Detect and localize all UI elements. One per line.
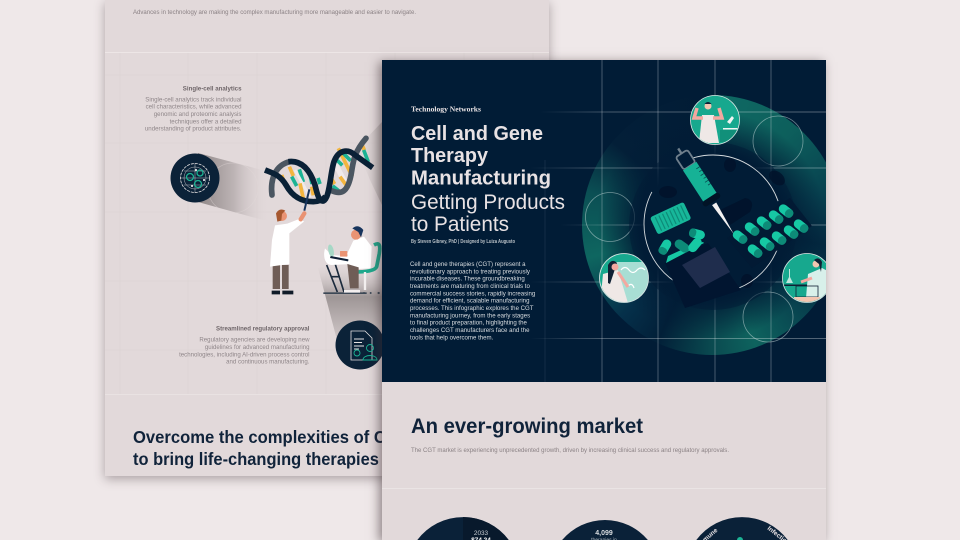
teal conic backdrop bbox=[582, 95, 842, 355]
chart: market size circle bbox=[417, 517, 509, 540]
intro paragraph bbox=[410, 261, 535, 341]
text block: single-cell analytics: genomic and proteomic analysis bbox=[154, 111, 242, 118]
beam: upper right bbox=[357, 122, 382, 205]
panel: dark hero header bbox=[382, 60, 826, 382]
intro text: Advances in technology are making the complex manufacturing more manageable and easier to navigate. bbox=[133, 9, 416, 16]
text block: single-cell analytics bbox=[145, 86, 242, 133]
intro paragraph: commercial success stories, rapidly increasing bbox=[410, 290, 535, 297]
text block: streamlined regulatory approval: Streamlined regulatory approval bbox=[216, 326, 310, 332]
intro paragraph: incurable diseases. These groundbreaking bbox=[410, 276, 525, 283]
title: to Patients bbox=[411, 212, 509, 236]
icon: DNA helix bbox=[265, 138, 373, 202]
intro paragraph: Cell and gene therapies (CGT) represent a bbox=[410, 261, 526, 268]
icon: pill bottle and label bbox=[650, 202, 741, 308]
icon: regulatory document circle bbox=[336, 320, 384, 370]
intro paragraph: treatments are maturing from clinical trials to bbox=[410, 283, 530, 290]
text block: single-cell analytics: Single-cell analytics bbox=[183, 86, 242, 92]
title: Manufacturing bbox=[411, 166, 551, 190]
chart: therapies circle bbox=[562, 520, 648, 540]
panel: back page bbox=[105, 0, 549, 476]
text block: streamlined regulatory approval: technologies, including AI-driven process control bbox=[179, 351, 310, 358]
text block: single-cell analytics: cell characteristics, while advanced bbox=[146, 104, 242, 111]
text block: single-cell analytics: techniques offer a detailed bbox=[170, 118, 242, 125]
market subheading: The CGT market is experiencing unprecedented growth, driven by increasing clinical success and regulatory approvals. bbox=[411, 447, 729, 454]
icon: scientist with microscope bbox=[690, 96, 740, 144]
text block: streamlined regulatory approval bbox=[179, 326, 310, 366]
beam: regulatory approval bbox=[318, 262, 382, 345]
title: Getting Products bbox=[411, 190, 565, 214]
title: Cell and Gene bbox=[411, 122, 543, 145]
heading: overcome the complexities: Overcome the complexities of CGT bbox=[133, 427, 409, 447]
text block: single-cell analytics: Single-cell analytics track individual bbox=[145, 96, 242, 103]
icon: single-cell analysis circle bbox=[170, 154, 220, 202]
chart: therapies circle: 4,099 bbox=[595, 530, 613, 537]
logo: Technology Networks bbox=[411, 104, 481, 113]
icon: syringe bbox=[670, 143, 742, 239]
intro paragraph: demand for efficient, scalable manufacturing bbox=[410, 298, 529, 305]
heading: overcome the complexities bbox=[133, 427, 409, 469]
icon: scientist with molecule board bbox=[600, 254, 648, 305]
chart: therapeutic area circle bbox=[696, 517, 794, 540]
text block: streamlined regulatory approval: and continuous manufacturing. bbox=[226, 359, 310, 366]
title bbox=[411, 122, 565, 236]
icon: blister pack bbox=[727, 198, 812, 268]
intro paragraph: tools that help overcome them. bbox=[410, 334, 494, 341]
intro paragraph: challenges CGT manufacturers face and the bbox=[410, 327, 530, 334]
beam: single-cell to DNA bbox=[198, 153, 270, 222]
text block: streamlined regulatory approval: Regulatory agencies are developing new bbox=[199, 337, 310, 344]
figure: standing scientist bbox=[270, 189, 309, 294]
text block: streamlined regulatory approval: guidelines for advanced manufacturing bbox=[205, 344, 310, 351]
title: Therapy bbox=[411, 144, 489, 167]
panel: front page bbox=[382, 60, 826, 540]
heading: overcome the complexities: to bring life-changing therapies to bbox=[133, 449, 399, 469]
icon: scientist with flasks bbox=[782, 253, 826, 303]
intro paragraph: to final product preparation, highlighting the bbox=[410, 320, 527, 327]
heading: market: An ever-growing market bbox=[411, 415, 643, 438]
chart: market size circle: 2033 bbox=[474, 530, 489, 537]
text block: single-cell analytics: understanding of product attributes. bbox=[145, 126, 242, 133]
byline: By Steven Gibney, PhD | Designed by Luiza Augusto bbox=[411, 239, 515, 245]
outline circles bbox=[586, 116, 803, 342]
intro paragraph: processes. This infographic explores the CGT bbox=[410, 305, 534, 312]
figure: seated scientist at desk bbox=[323, 226, 380, 294]
illustration: central disc with medicine bbox=[629, 142, 812, 310]
intro paragraph: manufacturing journey, from the early stages bbox=[410, 312, 530, 319]
intro paragraph: revolutionary approach to treating previously bbox=[410, 268, 531, 275]
